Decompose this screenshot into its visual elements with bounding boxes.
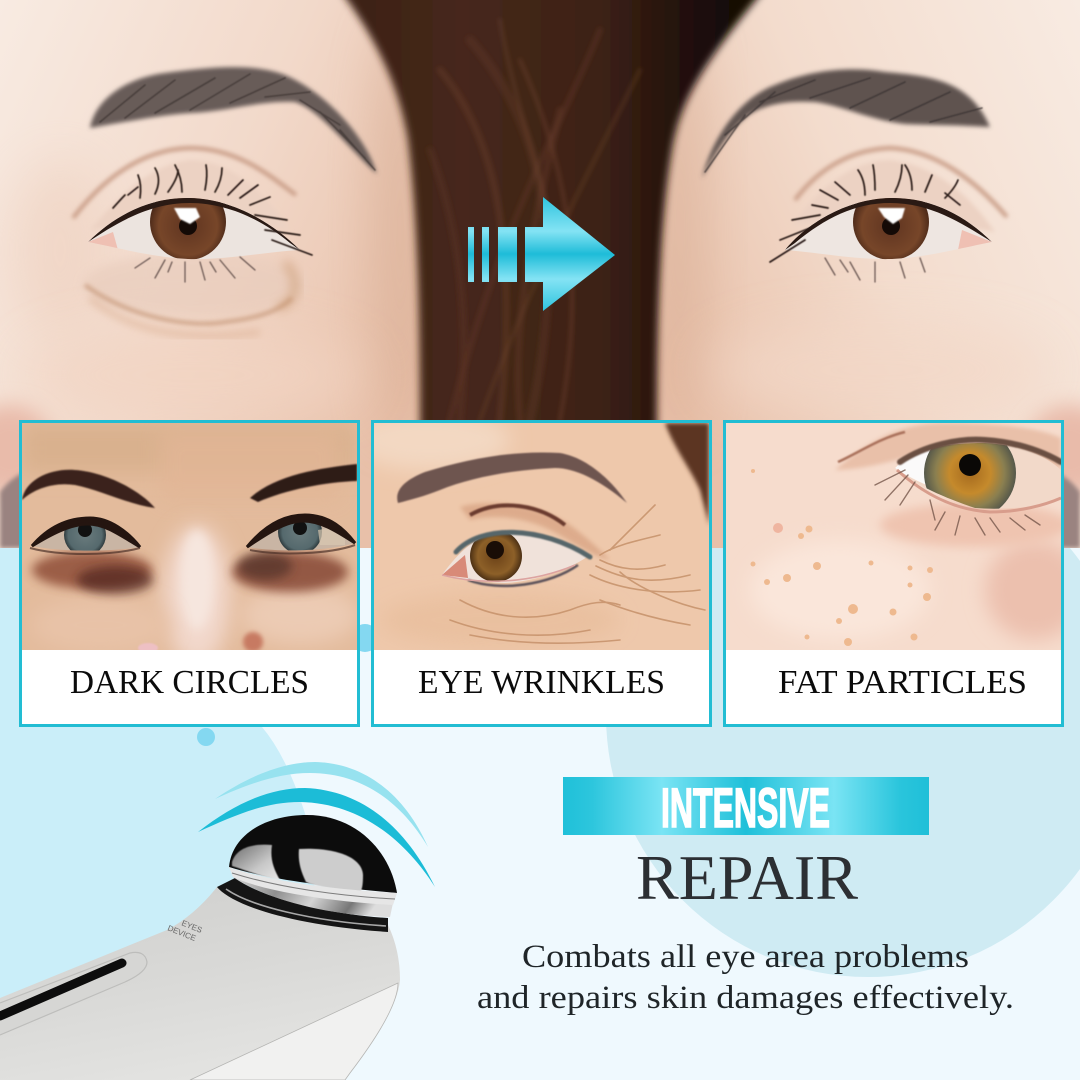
photo: before and after faces: [0, 0, 1080, 548]
banner: intensive: [563, 776, 929, 839]
hair parting: [325, 0, 780, 430]
banner: intensive: INTENSIVE: [661, 776, 830, 839]
caption: fat particles: FAT PARTICLES: [778, 664, 1027, 701]
right eyebrow: [702, 69, 990, 178]
panel: eye wrinkles: [350, 410, 710, 726]
metal ball head: [229, 815, 397, 893]
body text: Combats all eye area problems: [522, 939, 969, 975]
ball reflections: [229, 845, 397, 905]
photo: fat particles: [726, 423, 1080, 650]
body text: and repairs skin damages effectively.: [477, 980, 1014, 1016]
frame: [724, 422, 1062, 726]
photo: dark circles: [22, 423, 360, 665]
device body: [0, 887, 400, 1080]
body seam and lower shell: [190, 983, 398, 1080]
frame: [20, 422, 358, 726]
heading: repair: REPAIR: [636, 842, 858, 913]
right eye: [770, 148, 1007, 282]
device label: EYES: [180, 919, 203, 935]
frame: [372, 422, 710, 726]
decorative dots: [197, 624, 379, 746]
left eye: [73, 148, 312, 282]
motion arcs: [198, 762, 435, 887]
device: eye massager: [0, 815, 400, 1080]
arrow: before to after: [468, 197, 615, 311]
caption: dark circles: DARK CIRCLES: [70, 664, 309, 701]
right face skin: [640, 0, 1080, 548]
panel: dark circles: [20, 422, 360, 726]
caption: eye wrinkles: EYE WRINKLES: [418, 664, 665, 701]
device label: DEVICE: [166, 924, 197, 943]
body text: [477, 939, 1014, 1016]
left eyebrow: [90, 67, 377, 174]
left face skin: [0, 0, 440, 548]
left eye before: under-eye bag: [83, 253, 307, 336]
photo: eye wrinkles: [374, 423, 709, 650]
device label: [166, 919, 203, 943]
control slot: [0, 952, 147, 1035]
panel: fat particles: [724, 422, 1080, 726]
collar rings: [217, 872, 393, 932]
